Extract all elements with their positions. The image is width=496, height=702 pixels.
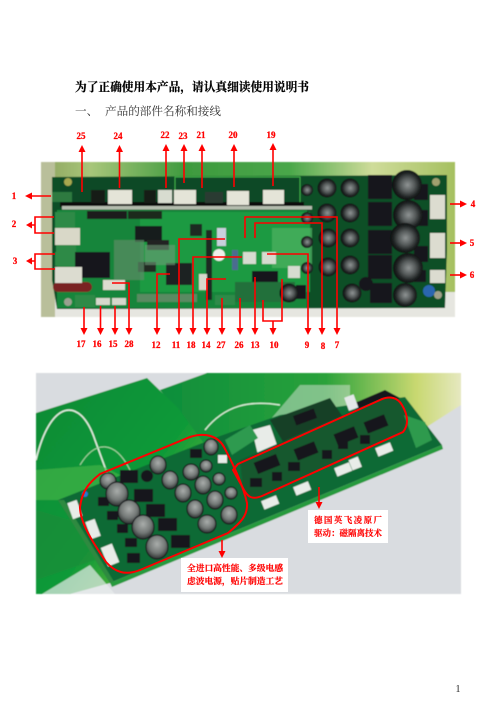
label group: top part numbers with arrows	[76, 130, 276, 192]
part 10: 10	[270, 340, 279, 350]
part 9: 9	[305, 340, 310, 350]
part 2: 2	[12, 219, 17, 229]
photo: circuit board top view	[41, 162, 455, 317]
part 24	[114, 131, 123, 188]
part 26: 26	[234, 340, 244, 350]
red outline: driver section	[233, 398, 407, 498]
part 1: 1	[12, 191, 17, 201]
callout: power supply	[181, 558, 288, 592]
part 21	[196, 130, 206, 188]
part 19: 19	[266, 130, 276, 140]
red outline: power supply section	[80, 435, 247, 573]
part 18: 18	[186, 340, 196, 350]
part 20	[228, 130, 238, 187]
part 13: 13	[250, 340, 260, 350]
part 6: 6	[470, 270, 475, 280]
part 26	[234, 298, 244, 350]
part 28: 28	[124, 339, 134, 349]
callout: driver: 德国英飞凌原厂	[314, 515, 382, 525]
part 19	[266, 130, 276, 186]
part 22	[160, 130, 170, 188]
part 4: 4	[471, 199, 476, 209]
section heading: 产品的部件名称和接线	[105, 104, 221, 118]
part 23	[178, 131, 188, 183]
part 7: 7	[335, 340, 340, 350]
arrow: driver callout	[316, 487, 322, 509]
title: 为了正确使用本产品，请认真细读使用说明书	[75, 80, 309, 94]
photo: angled view of the board on a poster	[36, 373, 461, 594]
part 5: 5	[470, 238, 475, 248]
part 11	[172, 239, 225, 350]
part 27: 27	[216, 340, 226, 350]
page number: 1	[456, 684, 460, 695]
part 20: 20	[228, 130, 238, 140]
label group: left part numbers with arrows	[12, 191, 55, 269]
part 12: 12	[152, 340, 161, 350]
part 17	[76, 307, 88, 349]
section heading: 一、	[75, 105, 98, 118]
part 27	[216, 298, 226, 350]
part 8	[255, 223, 326, 351]
part 24: 24	[114, 131, 123, 141]
part 25: 25	[76, 131, 86, 141]
callout: power supply: 虑波电源，贴片制造工艺	[187, 575, 283, 587]
part 7	[245, 217, 340, 350]
part 17: 17	[76, 339, 86, 349]
part 18	[186, 257, 242, 350]
part 15: 15	[108, 339, 118, 349]
part 10	[263, 279, 282, 350]
callout: driver: 驱动：磁隔离技术	[314, 528, 382, 538]
part 8: 8	[321, 341, 326, 351]
part 11: 11	[172, 340, 181, 350]
part 13	[250, 277, 260, 350]
part 21: 21	[196, 130, 206, 140]
label group: bottom part numbers with arrows	[76, 217, 340, 351]
arrow: power supply callout	[218, 540, 226, 558]
part 9	[267, 254, 312, 350]
part 14: 14	[202, 340, 211, 350]
part 23: 23	[178, 131, 188, 141]
part 14	[202, 279, 226, 350]
part 22: 22	[160, 130, 170, 140]
part 16: 16	[92, 339, 102, 349]
label group: right part numbers with arrows	[450, 199, 476, 280]
part 3: 3	[13, 256, 18, 266]
part 28	[112, 283, 134, 349]
callout: driver	[308, 510, 388, 543]
part 16	[92, 306, 104, 349]
part 25	[76, 131, 86, 192]
part 15	[108, 306, 118, 349]
callout: power supply: 全进口高性能、多级电感	[187, 562, 284, 573]
part 12	[152, 274, 170, 350]
